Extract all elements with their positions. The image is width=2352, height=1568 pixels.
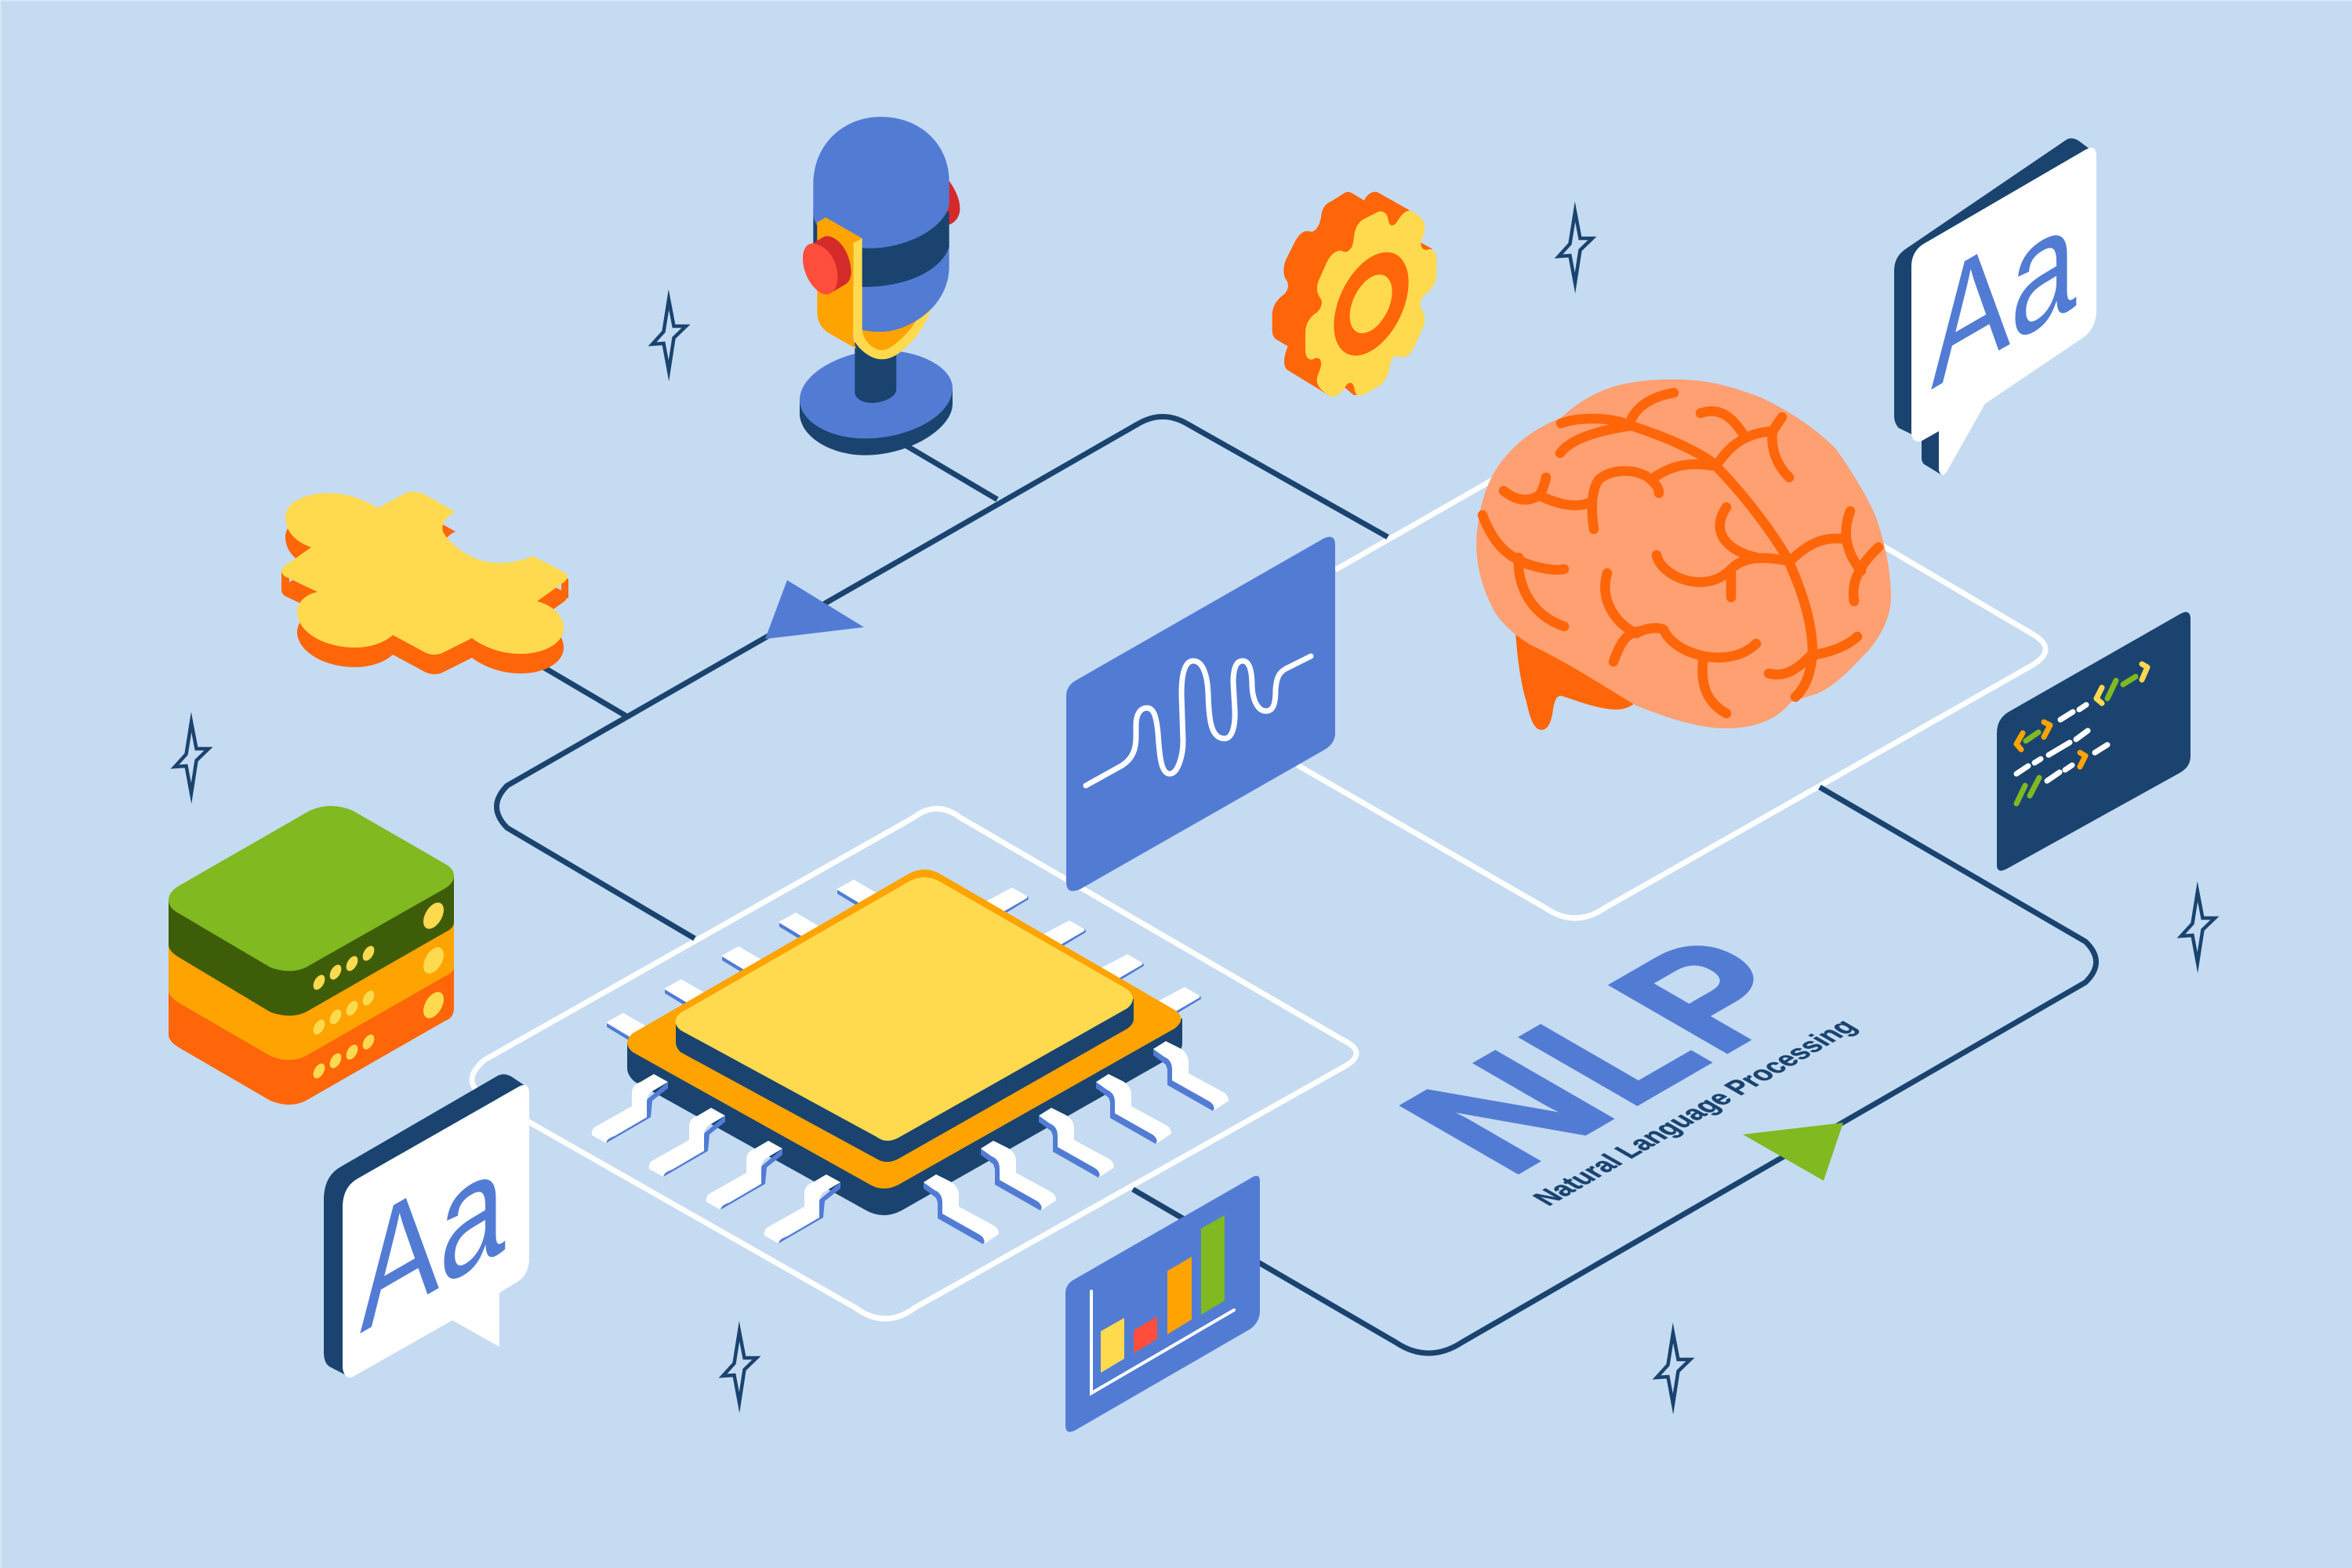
chip yellow top (676, 877, 1133, 1141)
front pins (592, 1041, 1229, 1244)
subtitle: Natural Language Processing (1526, 1014, 1864, 1210)
title: NLP: P (1564, 912, 1855, 1080)
connector: microphone (902, 443, 997, 499)
icon: puzzle piece (281, 492, 568, 674)
arrow: green triangle (1743, 1123, 1843, 1181)
connector: puzzle (543, 667, 627, 717)
sparkle stars (175, 212, 2215, 1404)
chip yellow depth (676, 999, 1134, 1162)
icon: server stack (169, 806, 454, 1105)
icon: microphone (800, 117, 960, 456)
chip: processor with pins (592, 869, 1229, 1244)
title: NLP (1355, 912, 1855, 1200)
white loop behind brain and panel (1298, 455, 2045, 918)
arrow: blue triangle (765, 580, 864, 639)
chip orange plate (627, 869, 1181, 1189)
icon: brain (1476, 379, 1891, 730)
panel: code editor (1997, 612, 2190, 871)
white loop around chip (472, 809, 1356, 1319)
speech bubble top right (1894, 138, 2096, 475)
dark flow line lower (1133, 787, 2096, 1353)
dark flow line upper (497, 417, 1388, 938)
speech bubble bottom left: Aa (360, 1107, 506, 1368)
speech bubble bottom left (324, 1074, 529, 1377)
panel: sound wave (1066, 537, 1335, 891)
chip base dark (627, 1018, 1182, 1215)
title: NLP: N (1355, 1024, 1659, 1200)
panel: bar chart (1065, 1176, 1260, 1432)
title: NLP: L (1474, 971, 1751, 1131)
back pins (607, 880, 1201, 1043)
icon: gear (1272, 192, 1436, 397)
speech bubble top right: Aa (1931, 163, 2077, 424)
